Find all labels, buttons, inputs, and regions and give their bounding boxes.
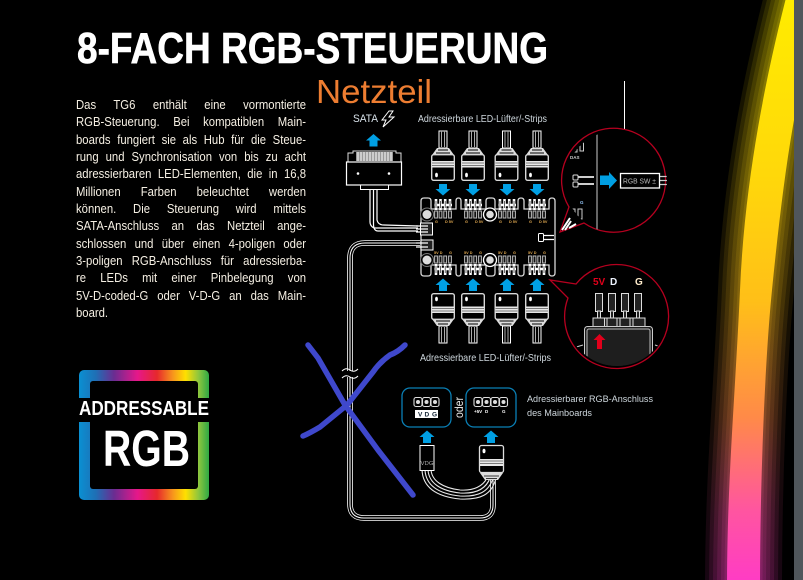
pin labels: 5V D: [528, 251, 537, 255]
pin labels: G: [513, 251, 516, 255]
cable: board to mainboard: [342, 243, 493, 518]
pin labels: 5V D: [498, 251, 507, 255]
body text: [76, 97, 306, 320]
header socket: 3-pin V D G: G: [432, 412, 437, 418]
annotation: Netzteil: Netzteil: [316, 73, 432, 110]
logo: addressable RGB: ADDRESSABLE: [79, 398, 209, 420]
small labels: DAS: [570, 155, 580, 160]
arrows: plugs to sockets: [420, 430, 498, 443]
4-pin plug: [480, 446, 504, 480]
pin labels: 5V D: [464, 251, 473, 255]
header socket: 3-pin V D G: D: [424, 412, 430, 418]
arrow: to RGB switch: [600, 172, 617, 189]
callout: pin assignment detail: G: [635, 277, 643, 288]
body text: RGB-Steuerung. Bei kompatiblen Main-: [76, 114, 306, 129]
SATA label: SATA: [353, 113, 379, 125]
pin labels: D 5V: [475, 220, 484, 224]
pin labels: G: [465, 220, 468, 224]
body text: adressierbaren LED-Elementen, die in 16,8: [76, 166, 306, 181]
arrow: SATA up: [366, 134, 381, 146]
bottom LED plugs: [432, 294, 548, 343]
pin labels: G: [435, 220, 438, 224]
arrow: red up: [594, 334, 606, 349]
adapter cable with VDG and 4-pin plugs: [420, 446, 504, 499]
body text: Das TG6 enthält eine vormontierte: [76, 97, 306, 112]
RGB controller board: [416, 198, 555, 276]
body text: board.: [76, 305, 108, 320]
top LED plugs: [432, 131, 548, 180]
header socket: 4-pin +5V D G: +5V: [474, 409, 482, 414]
body text: können. Die Steuerung wird mittels: [76, 201, 306, 216]
arrows: bottom plugs up: [436, 278, 544, 291]
body text: 5V-D-coded-G oder V-D-G an das Main-: [76, 288, 306, 303]
pin labels: 5V: [593, 277, 606, 288]
pin labels: G: [529, 220, 532, 224]
title: 8-FACH RGB-STEUERUNG: [77, 24, 548, 73]
callout: pin assignment detail: D: [610, 277, 617, 288]
annotation line: [624, 81, 626, 147]
icon: lightning bolt: [382, 111, 394, 127]
label: bottom LED strips: Adressierbare LED-Lüfter/-Strips: [420, 352, 551, 364]
pin labels: G: [499, 220, 502, 224]
strike-through blue X: [303, 345, 413, 495]
header socket: 3-pin V D G: V: [418, 412, 423, 418]
pin labels: D 5V: [509, 220, 518, 224]
header socket: 3-pin V D G: [402, 388, 451, 427]
pin labels: D 5V: [445, 220, 454, 224]
right connector: [538, 234, 554, 242]
callout: RGB switch detail: G: [580, 200, 584, 205]
body text: 3-poligen RGB-Anschluss für adressierba-: [76, 253, 306, 268]
logo: addressable RGB: [74, 370, 214, 500]
SATA connector: [346, 151, 418, 231]
RGB SW button: RGB SW ±: [623, 176, 656, 186]
body text: Millionen Farben beleuchtet werden: [76, 184, 306, 199]
top headers: [434, 199, 546, 218]
VDG plug: VDG: [420, 461, 434, 467]
body text: boards fungiert sie als Hub für die Steue-: [76, 132, 306, 147]
bottom headers: [434, 256, 546, 275]
body text: schlossen und über einen 4-poligen oder: [76, 236, 306, 251]
body text: re LEDs mit einer Pinbelegung von: [76, 270, 306, 285]
right edge grey bar: [794, 0, 803, 580]
label: mainboard RGB header: [527, 394, 653, 419]
pin labels: [434, 220, 548, 255]
label: top LED strips: Adressierbare LED-Lüfter/-Strips: [418, 113, 547, 125]
header socket: 4-pin +5V D G: [466, 388, 516, 427]
label: oder: oder: [452, 397, 466, 418]
label: mainboard RGB header: Adressierbarer RGB-Anschluss: [527, 394, 653, 405]
body text: SATA-Anschluss an das Netzteil ange-: [76, 218, 306, 233]
pin labels: G: [479, 251, 482, 255]
pin labels: 5V D: [434, 251, 443, 255]
header socket: 4-pin +5V D G: D: [485, 409, 489, 414]
mounting holes: [420, 208, 496, 266]
arrows: top plugs down: [436, 184, 544, 196]
glowing light band: [727, 0, 794, 580]
pin labels: G: [449, 251, 452, 255]
callout: pin assignment detail: [550, 264, 669, 370]
body text: rung und Synchronisation von bis zu acht: [76, 149, 306, 164]
left connectors: [416, 223, 433, 250]
pin labels: D 5V: [539, 220, 548, 224]
logo: addressable RGB: RGB: [103, 420, 190, 477]
label: mainboard RGB header: des Mainboards: [527, 408, 592, 419]
header socket: 4-pin +5V D G: G: [502, 409, 506, 414]
callout: RGB switch detail: [560, 128, 670, 236]
pin labels: G: [543, 251, 546, 255]
